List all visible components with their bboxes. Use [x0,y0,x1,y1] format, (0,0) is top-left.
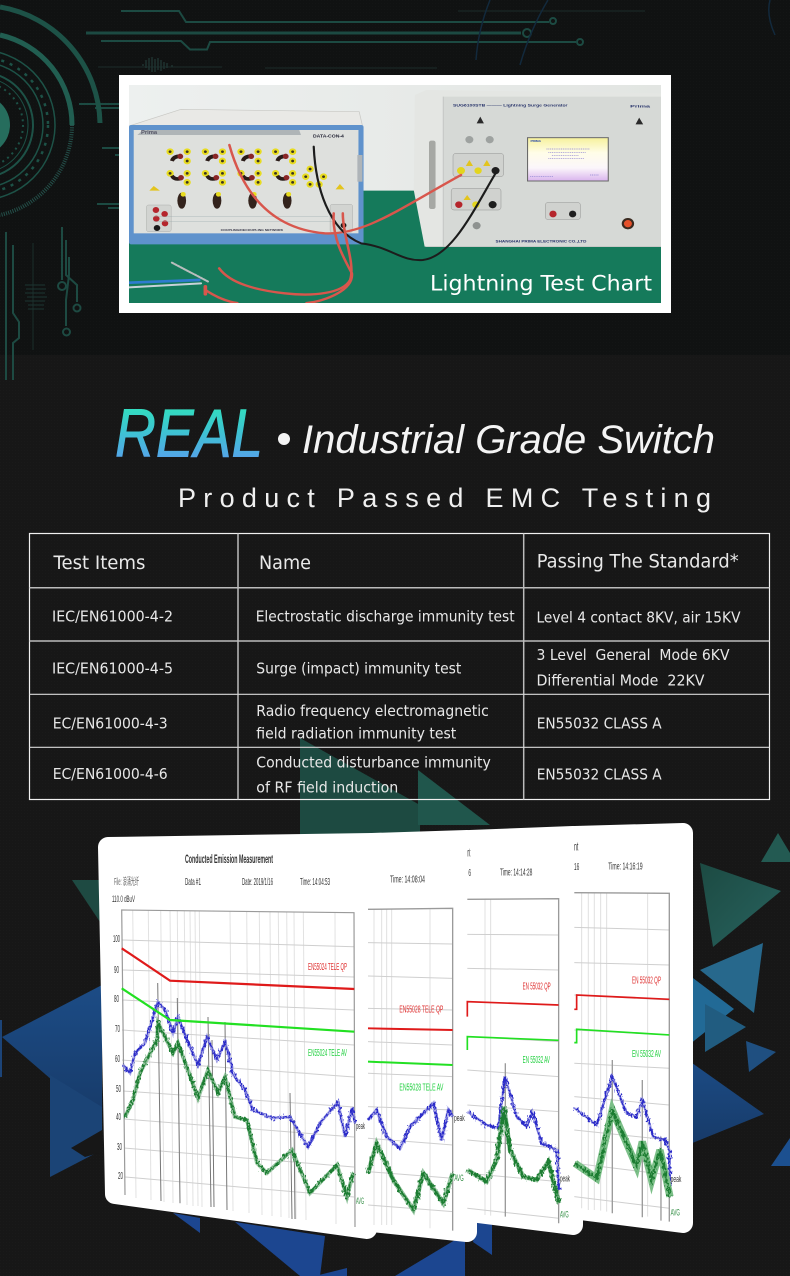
card 1 y-axis labels: 30 [117,1142,122,1153]
card 1 y-axis labels: 80 [114,994,119,1005]
cables [129,145,496,303]
table row: surge: IEC/EN61000-4-5 [52,660,173,678]
card 1 header text: Date: 2019/1/16 [242,877,273,888]
table row: electrostatic discharge: IEC/EN61000-4-2 [52,608,173,626]
table row: surge: 3 Level General Mode 6KV [536,646,730,664]
chart card 3: 6 [468,868,471,879]
equipment: coupling network box: Prima [141,130,158,136]
chart card 2: peak [454,1113,465,1123]
chart card 3: EN 55032 AV [523,1055,550,1066]
table row: radio frequency: field radiation immunity test [256,724,456,742]
headline: Industrial Grade Switch [302,418,715,462]
equipment: coupling network box [129,109,364,244]
card 1 header text: Conducted Emission Measurement [185,852,273,866]
decorative triangles [0,738,790,1276]
chart card 3 [467,846,570,1223]
card 1 blue trace [123,1002,355,1147]
photo caption: Lightning Test Chart [430,272,652,296]
table row: conducted disturbance: of RF field induction [256,778,398,796]
chart card 3: EN 55032 QP [523,981,551,992]
chart card 4: peak [671,1174,682,1184]
chart card 3: Time: 14:14:28 [500,868,533,879]
measurement report cards: peak [356,1121,365,1131]
card 1 limit and trace labels: EN55024 TELE QP [308,962,347,973]
card 1 y-axis labels [113,934,123,1182]
card 1 peak markers [158,983,295,1219]
decorative circuit graphics at top [79,0,775,208]
measurement report cards [108,833,683,1232]
photo card: lightning test chart [119,75,671,313]
chart card 2 [368,874,465,1231]
test standards table [30,534,770,800]
table row: radio frequency: EC/EN61000-4-3 [53,714,168,732]
table row: surge: Differential Mode 22KV [536,672,705,690]
chart card 4: AVG [671,1207,680,1217]
card 1 y-axis labels: 70 [115,1024,120,1035]
chart card 4: EN 55032 AV [632,1049,661,1060]
equipment: lightning surge generator: SUG6100STB ——— Lightning Surge Generator [453,104,568,108]
chart card 2: AVG [454,1173,464,1183]
table row: conducted disturbance: EC/EN61000-4-6 [53,765,168,783]
table row: conducted disturbance: EN55032 CLASS A [537,765,662,783]
equipment: coupling network box: COUPLING/DECOUPLING NETWORK [221,228,284,232]
chart card 2: EN55028 TELE QP [399,1004,443,1015]
table row: surge [52,646,730,690]
card 1 grid [122,910,355,1227]
chart card 3: AVG [560,1209,569,1219]
equipment: lightning surge generator: PRIMA [530,139,542,143]
table row: surge: Surge (impact) immunity test [256,660,461,678]
table row: conducted disturbance [53,753,662,796]
chart card 3: nt [467,846,471,860]
card 1 green trace [125,1023,353,1197]
headline [115,396,715,472]
table row: electrostatic discharge [52,608,741,627]
chart card 3: peak [560,1173,570,1183]
chart card 2: Time: 14:08:04 [390,874,425,885]
chart card 4 [574,839,682,1222]
card 1 y-axis labels: 100 [113,934,120,945]
subheading: Product Passed EMC Testing [178,483,711,513]
table header row: Test Items [53,553,145,574]
table header row: Name [259,553,311,574]
card 1 y-axis labels: 60 [115,1054,120,1065]
card 1 limit and trace labels [308,962,365,1206]
card 1 y-axis labels: 40 [116,1112,121,1123]
equipment: lightning surge generator [414,90,661,247]
card 1 header text: Data #1 [185,877,201,888]
table row: radio frequency: EN55032 CLASS A [537,714,662,732]
chart card 4: nt [574,839,579,853]
equipment: coupling network box: DATA-CON-4 [313,134,344,139]
chart card 1: conducted emission measurement: 20 [118,1171,123,1182]
card 1 y-axis labels: 50 [116,1084,121,1095]
card 1 limit lines [122,948,354,1032]
table row: radio frequency [53,702,662,742]
card 1 header text: File: 浪涌光纤 [114,875,139,888]
white card shapes [108,833,683,1232]
card 1 y-axis labels: 90 [114,965,119,976]
chart card 1: conducted emission measurement: Time: 14:04:53 [300,877,330,888]
chart card 4: Time: 14:16:19 [608,862,643,873]
table row: electrostatic discharge: Level 4 contact 8KV, air 15KV [536,609,741,627]
card 1 header text: 110.0 dBuV [112,894,135,904]
table header row: Passing The Standard* [537,551,739,572]
chart card 2: EN55028 TELE AV [399,1083,444,1094]
card 1 limit and trace labels: AVG [356,1196,364,1206]
card 1 header text [112,852,330,904]
equipment: lightning surge generator: SHANGHAI PRIMA ELECTRONIC CO.,LTD [496,239,587,243]
card 1 limit and trace labels: EN55024 TELE AV [308,1048,347,1059]
chart card 4: 16 [574,862,580,873]
decorative circuit traces lower left [6,227,80,380]
headline: REAL [115,396,263,472]
table row: conducted disturbance: Conducted disturbance immunity [256,753,491,771]
photo: test equipment on green desk [129,85,661,303]
chart card 4: EN 55032 QP [632,976,661,987]
table header row [53,551,739,574]
decorative radar rings [0,7,100,215]
table row: radio frequency: Radio frequency electromagnetic [256,702,489,720]
table row: electrostatic discharge: Electrostatic discharge immunity test [256,608,515,626]
chart card 1: conducted emission measurement [112,852,365,1227]
equipment: lightning surge generator: Prima [630,104,651,109]
